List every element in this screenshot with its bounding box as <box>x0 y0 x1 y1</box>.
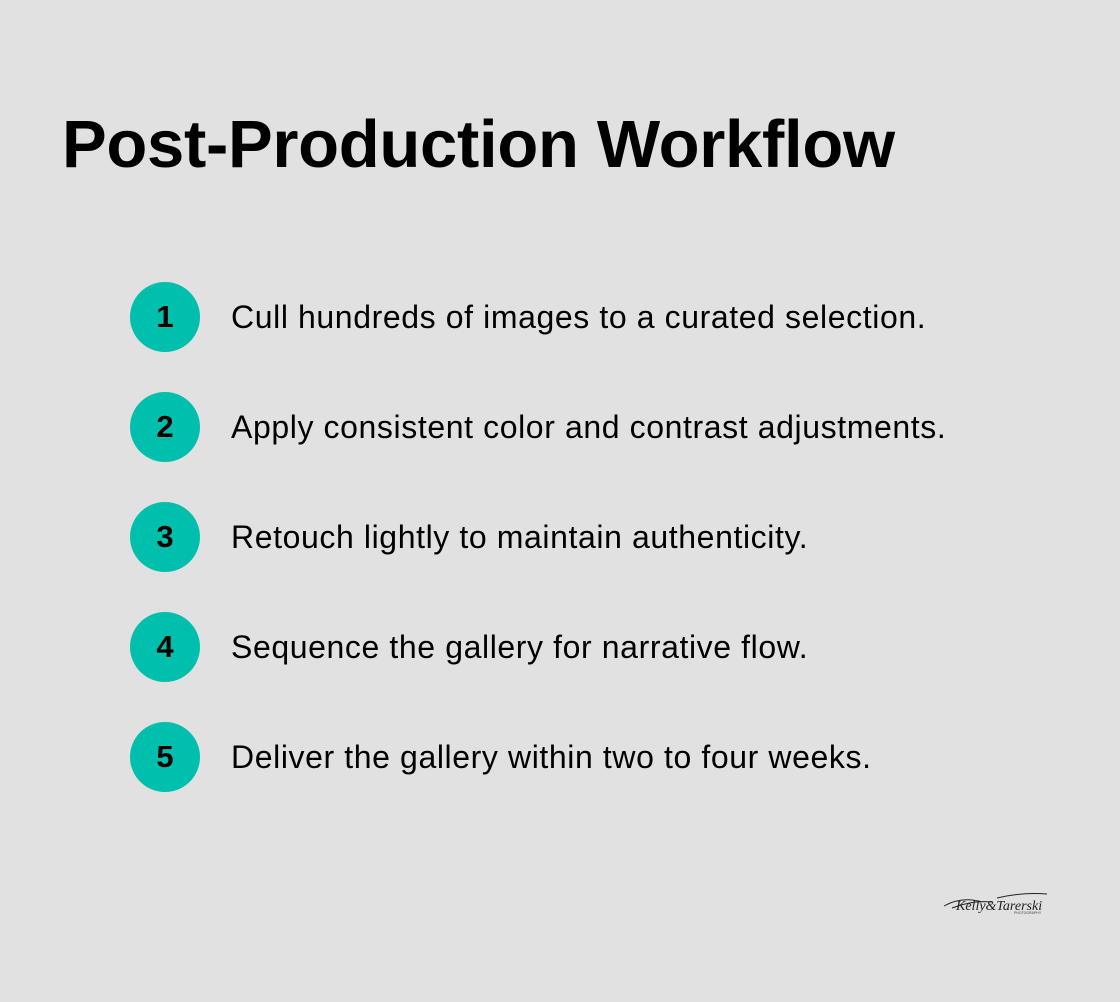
number badge 5 <box>130 722 200 792</box>
number badge 4 <box>130 612 200 682</box>
step 4: Sequence the gallery for narrative flow. <box>231 629 808 665</box>
step 3: Retouch lightly to maintain authenticity. <box>231 519 808 555</box>
number badge 3: 3 <box>156 519 174 554</box>
logo signature: Kelly&Tarerski <box>955 899 1042 914</box>
step 3 <box>130 502 808 572</box>
step 4 <box>130 612 808 682</box>
number badge 5: 5 <box>156 739 174 774</box>
step 1: Cull hundreds of images to a curated selection. <box>231 299 926 335</box>
number badge 1: 1 <box>156 299 174 334</box>
number badge 2 <box>130 392 200 462</box>
number badge 3 <box>130 502 200 572</box>
number badge 1 <box>130 282 200 352</box>
step 2: Apply consistent color and contrast adjustments. <box>231 409 946 445</box>
number badge 2: 2 <box>156 409 174 444</box>
number badge 4: 4 <box>156 629 174 664</box>
step 2 <box>130 392 946 462</box>
step 1 <box>130 282 926 352</box>
step 5 <box>130 722 872 792</box>
step 5: Deliver the gallery within two to four weeks. <box>231 739 872 775</box>
logo signature <box>944 893 1047 915</box>
title: Post-Production Workflow <box>62 107 895 182</box>
logo signature: PHOTOGRAPHY <box>1014 911 1042 915</box>
